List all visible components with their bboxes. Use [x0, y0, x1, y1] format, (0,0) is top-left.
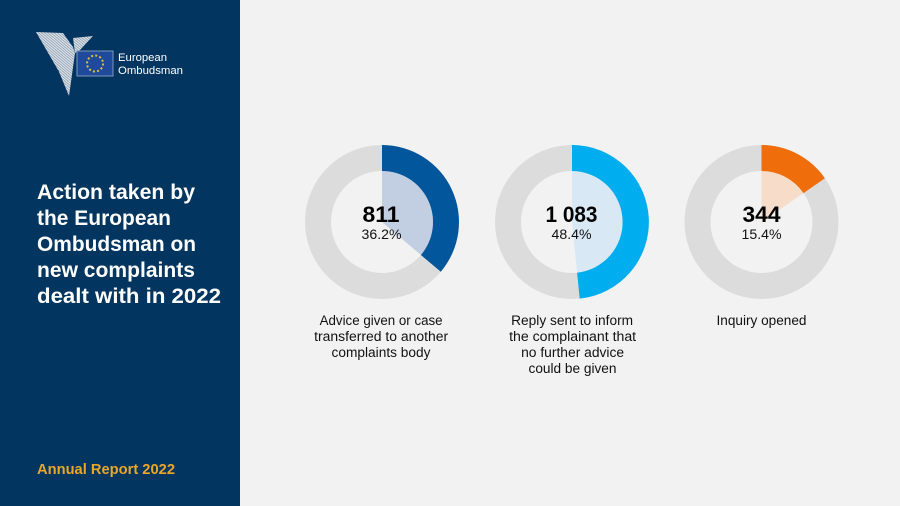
value: 1 083 — [546, 202, 598, 227]
label: no further advice — [521, 345, 624, 360]
icon: EU flag — [77, 51, 113, 76]
label: Inquiry opened — [716, 313, 806, 328]
panel: donut reply sent — [508, 145, 649, 376]
title: new complaints — [37, 258, 195, 282]
donut chart: 36.2% — [318, 145, 459, 286]
panel: donut inquiry opened — [698, 145, 826, 328]
label: Reply sent to inform — [511, 313, 633, 328]
donut chart: 15.4% — [698, 145, 826, 286]
logo: European Ombudsman — [36, 32, 183, 96]
panel: left sidebar — [0, 0, 240, 506]
percentage: 15.4% — [742, 226, 782, 242]
logo text: Ombudsman — [118, 65, 183, 77]
label: transferred to another — [314, 329, 449, 344]
panel: donut advice given — [314, 145, 459, 360]
percentage: 48.4% — [552, 226, 592, 242]
title: Ombudsman on — [37, 232, 196, 256]
title: dealt with in 2022 — [37, 284, 221, 308]
label: complaints body — [332, 345, 431, 360]
label: could be given — [528, 361, 616, 376]
value: 811 — [362, 202, 400, 227]
logo text: European — [118, 52, 167, 64]
annual report label: Annual Report 2022 — [37, 462, 175, 478]
title: the European — [37, 206, 171, 230]
label: Advice given or case — [320, 313, 443, 328]
icon: logo wings — [36, 32, 93, 96]
label: the complainant that — [509, 329, 636, 344]
donut chart: 48.4% — [508, 145, 649, 299]
title: Action taken by — [37, 180, 195, 204]
value: 344 — [742, 202, 781, 227]
percentage: 36.2% — [362, 226, 402, 242]
